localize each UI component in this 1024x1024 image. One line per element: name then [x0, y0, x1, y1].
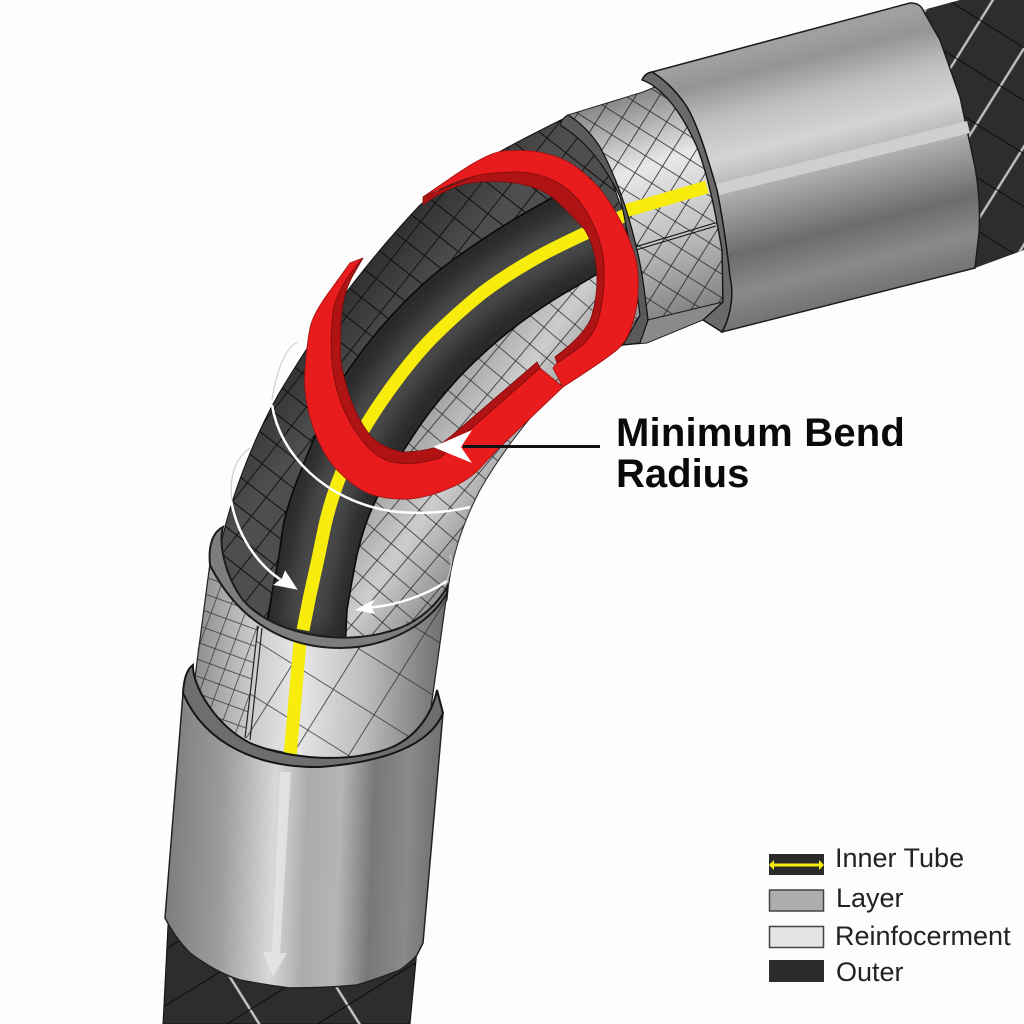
upper section: seam — [635, 223, 716, 250]
upper section: braid — [568, 87, 723, 320]
hose: inner tube black band — [268, 177, 596, 637]
arrow: right curved — [355, 581, 447, 614]
heading: minimum bend radius: Minimum Bend — [616, 411, 905, 455]
lower section: wide braid — [245, 593, 447, 762]
white rotation arcs and arrows — [231, 342, 470, 614]
legend: layer — [770, 883, 904, 913]
lower sleeve: body — [165, 693, 443, 988]
lower sleeve: faint arrow — [263, 772, 291, 977]
legend — [769, 843, 1011, 987]
lower section: ring lip — [210, 527, 447, 648]
lower section: left fine braid — [192, 563, 258, 738]
lower sleeve: ring lip — [183, 665, 443, 767]
callout: leader line and white arrow — [433, 430, 600, 463]
upper section: yellow line — [625, 187, 707, 211]
lower section: yellow line — [290, 642, 300, 757]
lower section: body — [192, 563, 447, 762]
hose: dark outer layer with braid — [215, 118, 640, 630]
legend: outer: Outer — [836, 957, 904, 987]
upper section: lower inner strip — [623, 302, 723, 345]
red bend radius ring — [305, 150, 638, 499]
legend: layer: Layer — [836, 883, 904, 913]
hose: gray reinforcement layer with braid — [345, 255, 645, 650]
upper section: ring lip — [560, 115, 648, 345]
arc: faint outline rings — [231, 342, 451, 585]
hose: yellow center line — [303, 214, 628, 630]
red ring: lower left arm — [305, 258, 563, 499]
outer hose: top right end — [923, 0, 1024, 268]
red ring: dark inner lip right — [423, 172, 604, 363]
legend: reinforcement: Reinfocerment — [835, 921, 1011, 951]
upper sleeve: ring lip — [642, 72, 732, 332]
arrow: left curved — [231, 500, 298, 590]
red ring: dark inner lip left — [331, 258, 540, 464]
upper reinforcement section — [560, 87, 723, 345]
upper sleeve: body — [652, 3, 980, 332]
curved hose section — [215, 118, 645, 650]
arc: upper bend guide — [272, 405, 470, 513]
legend: inner tube: Inner Tube — [835, 843, 964, 873]
legend: inner tube — [769, 843, 964, 875]
red ring: upper right arm — [423, 150, 638, 387]
callout line — [463, 445, 600, 448]
upper gray sleeve — [642, 3, 980, 332]
lower gray sleeve — [165, 665, 443, 988]
upper sleeve: highlight strip — [716, 121, 970, 195]
upper section: body — [568, 87, 723, 320]
heading: minimum bend radius: Radius — [616, 452, 749, 496]
lower section: seam — [245, 626, 262, 740]
lower reinforcement section — [192, 527, 447, 762]
outer hose: bottom end — [163, 925, 417, 1024]
callout arrowhead — [433, 430, 472, 463]
legend: outer — [769, 957, 904, 987]
